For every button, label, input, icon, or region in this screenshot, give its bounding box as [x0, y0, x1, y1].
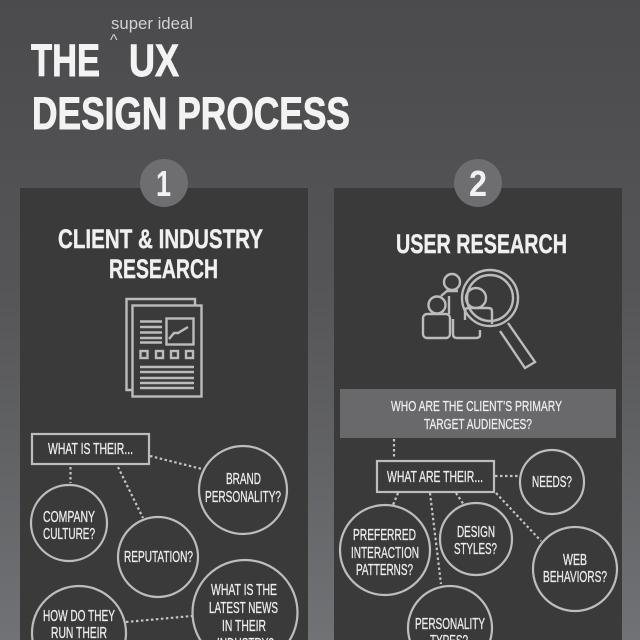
circle: brand personality: BRAND	[226, 471, 261, 488]
title: UX	[129, 35, 179, 86]
circle: web behaviors: WEB	[563, 552, 587, 569]
panel: client and industry research	[20, 159, 308, 640]
title: DESIGN PROCESS	[32, 88, 350, 139]
circle: needs	[520, 450, 584, 514]
panel: user research	[334, 159, 622, 640]
circle: personality types	[408, 586, 492, 640]
handwritten insertion: super ideal: super ideal	[111, 14, 193, 33]
handwritten insertion: super ideal: ^	[110, 32, 118, 49]
banner: primary target audiences: WHO ARE THE CLIENT’S PRIMARY	[391, 399, 562, 415]
circle: brand personality	[199, 446, 287, 534]
circle: latest industry news: IN THEIR	[222, 618, 266, 635]
handwritten insertion: super ideal	[110, 14, 193, 49]
title: THE	[31, 35, 100, 86]
circle: preferred interaction patterns	[340, 505, 430, 595]
banner: primary target audiences	[340, 389, 616, 438]
heading: client and industry research	[58, 224, 263, 284]
circle: needs: NEEDS?	[532, 474, 572, 491]
circle: how do they run their: HOW DO THEY	[43, 608, 115, 625]
icon: users under magnifying glass	[423, 270, 535, 368]
box: what is their: WHAT IS THEIR...	[48, 441, 133, 458]
banner: primary target audiences: TARGET AUDIENCES?	[424, 417, 532, 433]
title	[31, 35, 350, 139]
heading: client and industry research: CLIENT & INDUSTRY	[58, 224, 263, 254]
circle: design styles	[440, 503, 512, 575]
circle: personality types: PERSONALITY	[415, 616, 485, 633]
circle: reputation	[118, 517, 198, 597]
circle: preferred interaction patterns: INTERACTION	[351, 545, 419, 562]
circle: company culture: CULTURE?	[43, 526, 95, 543]
circle: brand personality: PERSONALITY?	[205, 489, 281, 506]
step number 1	[140, 159, 188, 207]
icon: documents with chart	[126, 299, 202, 396]
step number 1: 1	[156, 163, 171, 204]
circle: latest industry news: WHAT IS THE	[211, 582, 277, 599]
circle: latest industry news	[192, 560, 298, 640]
connector dotted lines	[393, 439, 541, 584]
circle: how do they run their	[32, 586, 126, 640]
step number 2	[454, 159, 502, 207]
box: what are their	[377, 461, 494, 492]
circle: company culture: COMPANY	[43, 509, 95, 526]
box: what is their	[32, 434, 149, 464]
circle: reputation: REPUTATION?	[124, 549, 193, 566]
circle: company culture	[31, 485, 107, 561]
circle: preferred interaction patterns: PATTERNS?	[356, 562, 413, 579]
heading: user research: USER RESEARCH	[396, 229, 567, 259]
connector dotted lines	[70, 456, 202, 622]
circle: preferred interaction patterns: PREFERRED	[353, 527, 416, 544]
circle: design styles: STYLES?	[454, 541, 497, 558]
circle: web behaviors	[533, 527, 617, 611]
heading: client and industry research: RESEARCH	[109, 254, 218, 284]
circle: design styles: DESIGN	[457, 524, 495, 541]
circle: latest industry news: LATEST NEWS	[209, 600, 278, 617]
step number 2: 2	[469, 163, 487, 204]
circle: web behaviors: BEHAVIORS?	[543, 569, 607, 586]
box: what are their: WHAT ARE THEIR...	[387, 469, 483, 486]
